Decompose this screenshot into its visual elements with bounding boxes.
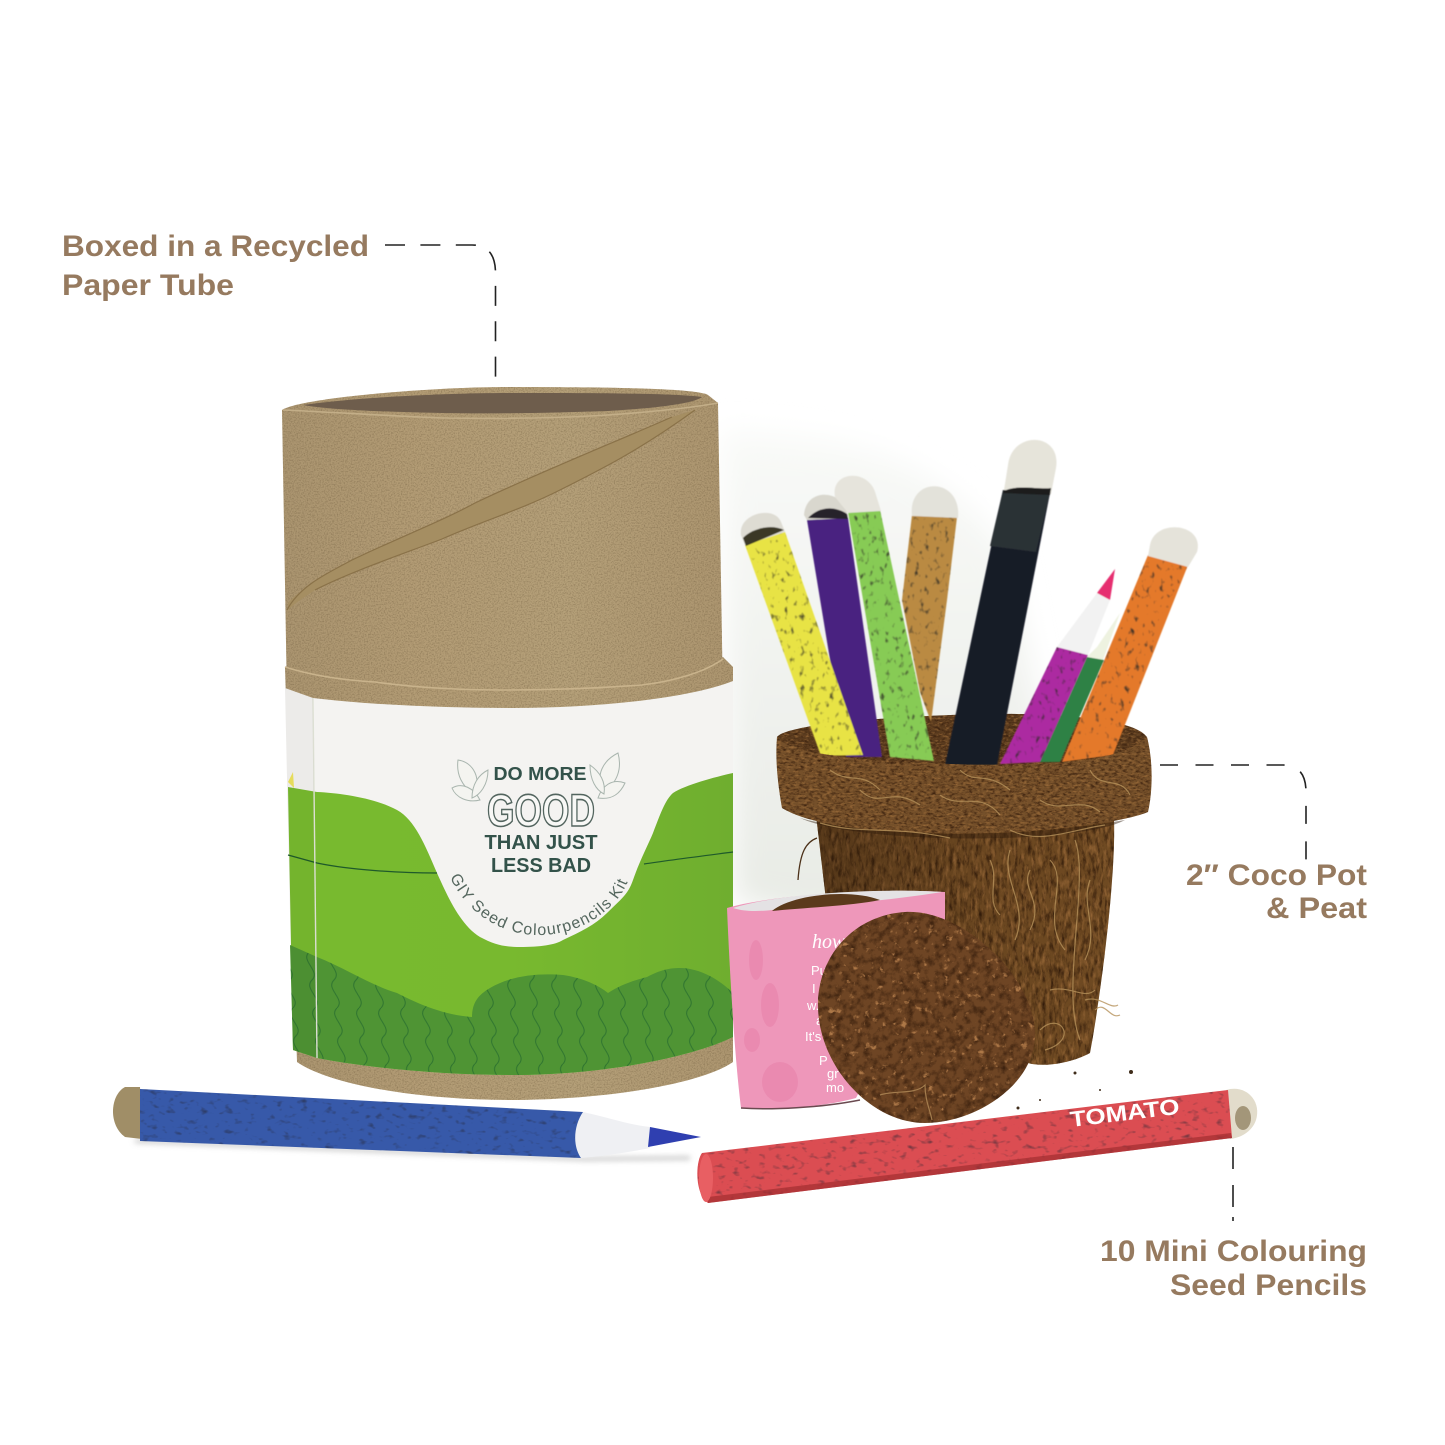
dark green hills — [290, 945, 733, 1075]
pencil end — [699, 1154, 713, 1202]
callout: coco pot and peat — [1160, 765, 1367, 925]
callout text: Seed Pencils — [1170, 1269, 1367, 1302]
curved kit name path — [450, 866, 632, 935]
peat inside packet — [772, 894, 880, 911]
sleeve rim line — [285, 659, 723, 690]
callout text: & Peat — [1266, 892, 1367, 925]
red seed pencil — [697, 1089, 1257, 1203]
pencil shadow — [135, 1141, 690, 1159]
packet heading: how t — [812, 931, 856, 953]
pencil body — [697, 1090, 1232, 1203]
disc fibres — [880, 1085, 932, 1120]
blue seed pencil — [113, 1087, 701, 1159]
packet instructions: Pu — [811, 963, 827, 978]
callout text: Paper Tube — [62, 269, 234, 302]
packet instructions: a — [816, 1013, 824, 1028]
horizon lines — [288, 852, 733, 873]
stray root — [798, 838, 817, 880]
pencils in pot — [741, 440, 1198, 765]
THAN JUST: THAN JUST — [484, 832, 598, 854]
leader line — [1232, 1147, 1234, 1223]
dark green coloured pencil — [1040, 613, 1120, 762]
soil crumbs — [1016, 1070, 1133, 1110]
paper tube — [282, 387, 723, 700]
pink instruction packet — [727, 891, 945, 1109]
light green pencil — [835, 476, 934, 761]
purple pencil — [804, 495, 882, 757]
label heading — [484, 763, 598, 877]
packet instructions — [805, 963, 844, 1095]
front rim highlight — [283, 403, 718, 418]
callout text: 10 Mini Colouring — [1100, 1235, 1367, 1268]
green field — [288, 773, 733, 1075]
packet instructions: I — [812, 981, 816, 996]
packet instructions: w. — [806, 998, 819, 1013]
packet instructions: It's — [805, 1029, 822, 1044]
background wall shadow — [722, 430, 1040, 915]
peat disc — [818, 912, 1035, 1123]
left leaf sprig — [452, 760, 488, 801]
callout text: 2″ Coco Pot — [1186, 859, 1367, 892]
packet opening — [733, 891, 942, 911]
GOOD: GOOD — [487, 785, 595, 836]
pencil body — [140, 1089, 583, 1158]
LESS BAD: LESS BAD — [491, 855, 591, 877]
seed capsule — [113, 1087, 142, 1139]
yellow pencil — [741, 513, 863, 756]
label shading on flap — [285, 688, 317, 1058]
pot body shading — [816, 815, 1114, 1062]
packet instructions: mo — [826, 1080, 844, 1095]
packet body — [727, 891, 945, 1109]
wavy hill lines — [290, 953, 733, 1075]
tube opening — [303, 393, 702, 413]
pot rim — [776, 737, 1152, 833]
packet instructions: P — [819, 1053, 828, 1068]
tube body — [282, 387, 723, 700]
disc body — [818, 912, 1035, 1123]
packet instructions: gr — [827, 1066, 839, 1081]
label base — [285, 681, 733, 1075]
coir fibres — [820, 770, 1130, 1050]
seam lines — [287, 410, 695, 610]
TOMATO: TOMATO — [1069, 1094, 1181, 1132]
callout text: Boxed in a Recycled — [62, 230, 369, 263]
sleeve with label — [284, 657, 734, 1100]
callout: seed pencils — [1100, 1147, 1367, 1302]
yellow flower on flap — [288, 772, 294, 788]
kit name text: GIY Seed Colourpencils Kit — [452, 874, 628, 936]
orange pencil — [1062, 527, 1198, 762]
label flap edge — [313, 698, 317, 1058]
rim underside shadow — [800, 818, 1125, 839]
packet bottom shadow — [741, 1100, 860, 1109]
magenta coloured pencil — [1000, 569, 1115, 764]
pot back interior — [777, 714, 1147, 765]
ochre pencil — [902, 486, 958, 722]
shadow edge — [708, 1133, 1232, 1203]
blue tip — [648, 1127, 701, 1147]
right leaf sprig — [590, 753, 625, 798]
black pencil — [945, 440, 1056, 765]
pot body — [816, 815, 1114, 1065]
leader line — [1160, 765, 1306, 862]
capsule seeds — [1235, 1106, 1251, 1130]
spiral seam — [288, 410, 695, 610]
packet blossoms — [744, 940, 798, 1102]
DO MORE: DO MORE — [494, 763, 586, 784]
coco pot — [776, 737, 1152, 1065]
seed capsule — [1226, 1089, 1257, 1139]
callout: recycled paper tube — [62, 230, 496, 380]
leader line — [385, 245, 496, 380]
white sharpened section — [575, 1112, 650, 1158]
sleeve kraft body — [285, 657, 733, 1100]
